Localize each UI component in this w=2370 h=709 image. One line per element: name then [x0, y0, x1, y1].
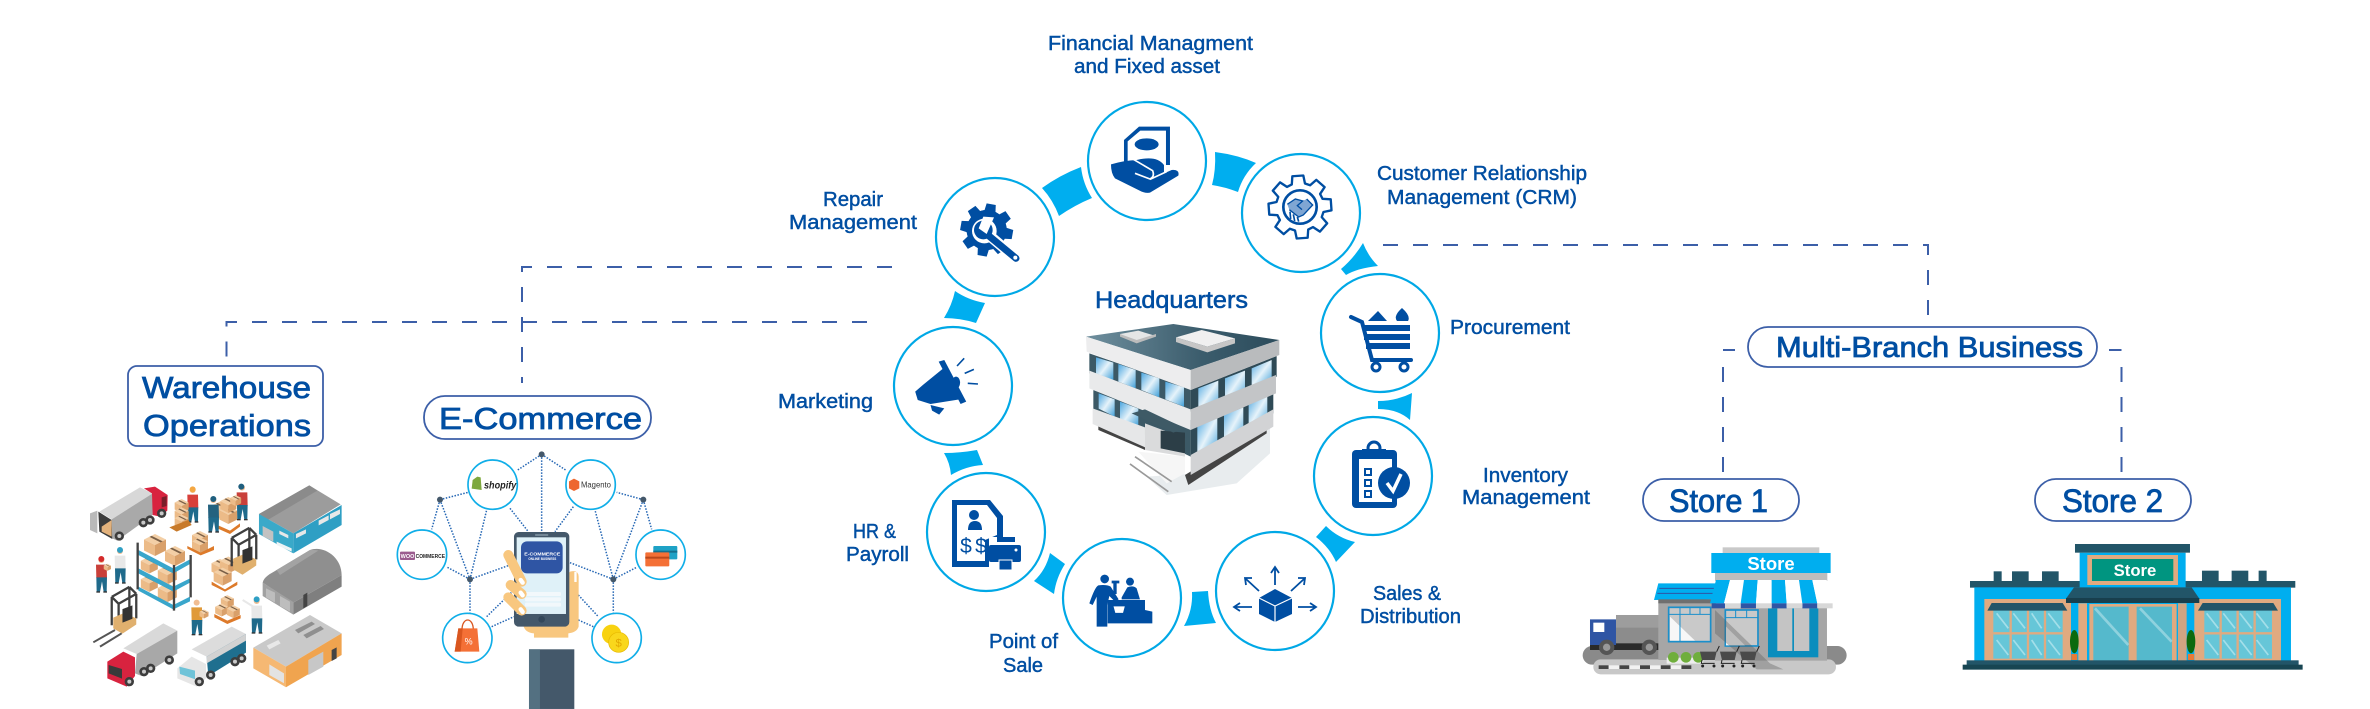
sign: Store — [2114, 561, 2156, 580]
module: Procurement — [1321, 274, 1570, 392]
badge: shopping bag — [443, 613, 492, 663]
lower right windows — [1191, 387, 1273, 457]
module: HR & Payroll — [846, 473, 1045, 591]
illustration: Store 2 building — [1963, 544, 2303, 670]
label — [1377, 163, 1587, 209]
icon: clipboard with check — [1352, 442, 1410, 508]
label — [1360, 583, 1461, 628]
store sign: Store — [1747, 553, 1795, 574]
label — [1462, 465, 1590, 509]
base — [1098, 423, 1145, 450]
building: grey quonset hangar — [263, 549, 342, 615]
module: Customer Relationship Management — [1242, 154, 1587, 272]
module: Marketing — [778, 327, 1012, 445]
label: Management — [1462, 487, 1590, 509]
smartphone: E-COMMERCE — [524, 552, 561, 558]
badge: Magento — [566, 460, 615, 509]
rooftop units — [1120, 330, 1235, 352]
ground — [1583, 646, 1847, 674]
icon: megaphone — [915, 358, 978, 415]
smartphone: ONLINE BUSINESS — [528, 557, 557, 561]
label: Marketing — [778, 391, 873, 413]
right window — [2194, 599, 2281, 661]
ground shadow — [1147, 427, 1270, 495]
icon: handshake gear — [1267, 174, 1333, 240]
fingers — [508, 555, 577, 612]
illustration: headquarters building — [1086, 324, 1279, 495]
side shop — [1654, 583, 1717, 664]
heading: Headquarters: Headquarters — [1095, 287, 1248, 314]
badge: payment cards — [636, 530, 685, 579]
panel: Store 2 label — [2035, 479, 2191, 521]
label — [789, 189, 917, 234]
module: Financial Management — [1048, 33, 1253, 220]
roof — [1086, 324, 1279, 370]
building: orange depot — [253, 615, 342, 687]
label — [846, 521, 909, 566]
label: Repair — [823, 189, 883, 211]
label: Financial Managment — [1048, 33, 1253, 55]
link arcs around ERP ring — [944, 152, 1412, 626]
store sign — [1711, 553, 1831, 574]
shopping carts — [1700, 646, 1759, 667]
label: Distribution — [1360, 606, 1461, 628]
icon: payslip and printer: $ — [960, 535, 972, 558]
icon: box with arrows — [1234, 567, 1316, 622]
canopy — [2066, 587, 2199, 603]
label — [1048, 33, 1253, 78]
base right — [1185, 425, 1267, 485]
truck: red — [107, 623, 177, 687]
icon: cashier and customer — [1089, 575, 1152, 627]
icon: payslip and printer: $ — [975, 535, 987, 558]
upper windows — [1089, 353, 1277, 412]
connector: Multi-Branch to Store 1 — [1723, 350, 1735, 472]
badge: shopping bag: % — [465, 637, 473, 647]
module: Inventory Management — [1314, 417, 1590, 535]
badge: coins: $ — [615, 637, 622, 649]
palm — [523, 571, 579, 638]
module: Point of Sale — [989, 539, 1181, 677]
left window — [1984, 599, 2071, 661]
connector: Multi-Branch to Store 2 — [2109, 350, 2122, 472]
potted plants — [2070, 630, 2195, 660]
badge: Shopify — [468, 460, 517, 509]
label: HR & — [853, 521, 897, 543]
concrete bands — [1089, 371, 1276, 475]
building: teal warehouse — [259, 485, 342, 553]
module: Sales & Distribution — [1216, 532, 1461, 650]
label: and Fixed asset — [1074, 56, 1220, 78]
icon: payslip and printer — [952, 500, 1021, 570]
label: Procurement — [1450, 317, 1570, 339]
parapet — [1086, 337, 1279, 390]
panel: Warehouse Operations label: Warehouse — [142, 370, 311, 405]
panel: Store 1 label — [1643, 479, 1799, 521]
network dotted links — [432, 454, 652, 627]
icon: document on hand — [1111, 127, 1179, 193]
main shop — [1715, 547, 1827, 669]
label: Customer Relationship — [1377, 163, 1587, 185]
badge: WooCommerce: COMMERCE — [416, 554, 445, 560]
label: Management — [789, 212, 917, 234]
panel: Store 1 label: Store 1 — [1669, 483, 1768, 519]
label: Inventory — [1483, 465, 1568, 487]
storage rack with boxes — [138, 534, 191, 611]
panel: E-Commerce label — [424, 396, 651, 439]
awning — [1710, 580, 1833, 608]
truck with open container — [90, 487, 168, 541]
connector: ERP to Multi-Branch Business — [1383, 245, 1928, 326]
label: Sale — [1003, 655, 1043, 677]
panel: Multi-Branch Business label: Multi-Branch Business — [1776, 332, 2083, 364]
rooftop — [1970, 571, 2295, 588]
workers and boxes — [93, 484, 262, 647]
network nodes — [437, 451, 646, 582]
smartphone — [514, 532, 569, 627]
badge: WooCommerce: WOO — [401, 554, 415, 560]
icon: shopping cart — [1351, 308, 1411, 371]
label: Point of — [989, 631, 1058, 653]
module: Repair Management — [789, 178, 1054, 296]
panel: Warehouse Operations label: Operations — [143, 408, 311, 443]
badge: coins — [592, 613, 641, 663]
lower left windows and band — [1093, 390, 1191, 457]
icon: gear and wrench — [956, 200, 1017, 260]
label — [989, 631, 1058, 677]
delivery truck — [1590, 615, 1659, 655]
panel: Warehouse Operations label — [128, 366, 323, 446]
label: Management (CRM) — [1387, 187, 1577, 209]
label: Sales & — [1373, 583, 1442, 605]
steps — [1963, 660, 2303, 670]
illustration: e-commerce hub with phone — [397, 451, 685, 709]
panel: Store 2 label: Store 2 — [2062, 483, 2163, 519]
badge: WooCommerce — [397, 530, 447, 579]
panel: Multi-Branch Business label — [1748, 327, 2097, 367]
sign — [2087, 555, 2178, 585]
entrance doors — [2078, 603, 2187, 661]
connector: ERP to E-Commerce — [522, 267, 892, 383]
badge: Magento: Magento — [581, 480, 611, 490]
illustration: Store 1 building — [1583, 547, 1847, 674]
illustration: warehouse operations isometric collage — [90, 484, 342, 687]
connector: ERP to Warehouse — [226, 322, 867, 363]
truck: blue — [177, 627, 246, 687]
entrance — [1130, 409, 1185, 492]
panel: E-Commerce label: E-Commerce — [439, 401, 642, 436]
walls — [1974, 544, 2291, 661]
badge: Shopify: shopify — [484, 480, 517, 491]
label: Payroll — [846, 544, 909, 566]
sleeve — [529, 649, 574, 709]
